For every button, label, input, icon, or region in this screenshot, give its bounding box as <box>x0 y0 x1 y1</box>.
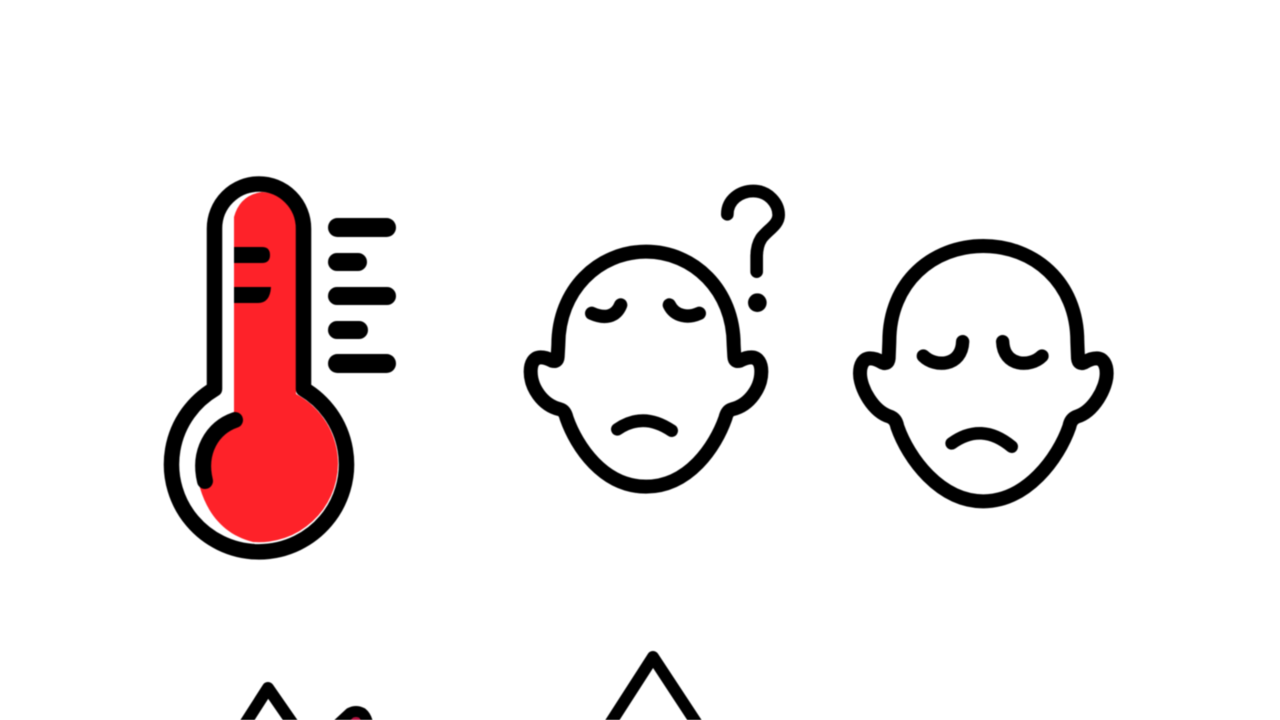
thermometer red fill <box>200 192 338 542</box>
red item outline <box>336 712 368 720</box>
question mark dot <box>748 293 767 312</box>
head outline <box>531 252 761 487</box>
icon: confused sad face with question mark <box>531 191 779 487</box>
frown <box>617 421 672 431</box>
closed eyes <box>923 342 1042 363</box>
icon: partial triangle at bottom <box>243 688 295 720</box>
icon: thermometer <box>172 184 396 552</box>
closed eyes <box>592 305 699 316</box>
icon: partial water drop at bottom <box>606 657 701 720</box>
question mark <box>727 191 779 272</box>
scale marks <box>328 218 396 373</box>
icon: sad face <box>860 246 1107 501</box>
inner tube tick marks <box>234 247 271 303</box>
icon: partial red item at bottom <box>336 712 368 720</box>
frown <box>952 433 1012 447</box>
thermometer inner highlight arc <box>203 420 235 481</box>
thermometer outline <box>172 184 347 552</box>
head outline <box>860 246 1107 501</box>
